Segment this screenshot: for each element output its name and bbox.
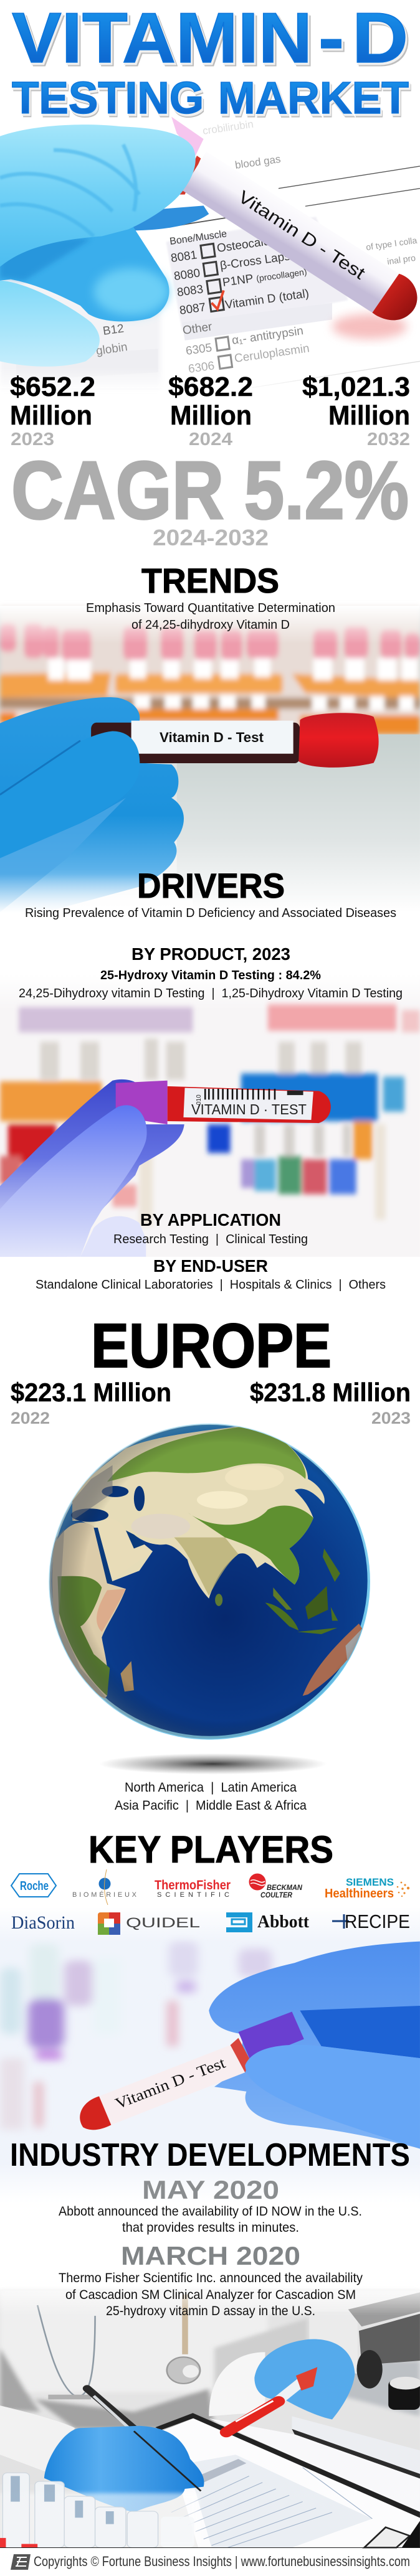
tube label text: VITAMIN D · TEST (191, 1101, 307, 1117)
title: D (353, 1, 409, 80)
market value 2023: 2023 (11, 430, 54, 449)
by product list: 24,25-Dihydroxy vitamin D Testing | 1,25-Dihydroxy Vitamin D Testing (19, 987, 403, 1000)
form text: 8087 (179, 301, 207, 317)
logo: Roche: Roche (20, 1879, 49, 1893)
icon: Fortune Business Insights logo (11, 2554, 31, 2570)
form text: 6306 (188, 359, 216, 376)
title: - (321, 2, 346, 81)
logo: DiaSorin: DiaSorin (11, 1912, 75, 1933)
title: TESTING (13, 75, 205, 125)
logo: Siemens Healthineers (325, 1876, 409, 1901)
title: TESTING (14, 77, 206, 126)
form text: 6305 (185, 341, 213, 358)
title: D (352, 0, 408, 78)
tube label text: Vitamin D - Test (160, 730, 264, 745)
logo: Beckman Coulter: COULTER (260, 1891, 292, 1899)
panel: hero (0, 0, 420, 449)
icon: gloved hand holding test tube (0, 116, 418, 367)
market value 2024: $682.2 (168, 372, 253, 402)
CAGR callout: 2024-2032 (153, 525, 269, 550)
heading: Europe: EUROPE (91, 1311, 332, 1381)
form text: 8080 (173, 266, 201, 283)
hero fade (0, 367, 420, 388)
form text: of type I colla (365, 235, 418, 252)
market value 2024 (168, 372, 253, 449)
by application heading: BY APPLICATION (140, 1210, 281, 1229)
heading: key players: KEY PLAYERS (88, 1828, 333, 1871)
form text: crobilirubin (202, 118, 254, 137)
title: MARKET (220, 77, 411, 126)
logo: Quidel (98, 1912, 200, 1935)
form text (95, 118, 418, 376)
Europe value 2023: 2023 (371, 1409, 411, 1427)
title (12, 0, 411, 126)
form text: Vitamin D (total) (224, 287, 310, 312)
Europe value 2023: $231.8 Million (250, 1378, 411, 1407)
Europe value 2022 (11, 1378, 171, 1427)
logo: Beckman Coulter (249, 1874, 302, 1899)
development: March 2020: MARCH 2020 (121, 2241, 300, 2270)
market value 2024: Million (170, 400, 252, 431)
development: March 2020: of Cascadion SM Clinical Analyzer for Cascadion SM (65, 2288, 356, 2302)
icon: globe (48, 1424, 375, 1774)
title: D (355, 2, 411, 81)
logo: Thermo Fisher Scientific: ThermoFisher (155, 1878, 231, 1892)
other regions list (115, 1780, 307, 1813)
by product lead value: 25-Hydroxy Vitamin D Testing : 84.2% (100, 969, 321, 982)
form text: inal pro (386, 253, 416, 266)
tube label text: Vitamin D - Test (235, 187, 369, 283)
form paper background (0, 111, 420, 388)
trends text: Emphasis Toward Quantitative Determination (86, 601, 335, 615)
market value 2032: 2032 (367, 430, 410, 449)
market value 2032: $1,021.3 (302, 372, 410, 402)
by end-user heading: BY END-USER (153, 1256, 268, 1276)
development: May 2020 (59, 2175, 362, 2235)
logo: Thermo Fisher Scientific (155, 1878, 231, 1899)
panel: segments (0, 944, 420, 1292)
by end-user list: Standalone Clinical Laboratories | Hospitals & Clinics | Others (36, 1278, 386, 1292)
other regions list: Asia Pacific | Middle East & Africa (115, 1798, 307, 1813)
title: VITAMIN (12, 0, 312, 78)
market value 2032 (302, 372, 410, 449)
title: - (320, 1, 345, 80)
photo: lab clinician writing and holding a tube (0, 2290, 420, 2547)
development: March 2020 (59, 2241, 363, 2318)
trends text (86, 601, 335, 632)
form text: Ceruloplasmin (234, 342, 310, 365)
panel: industry developments photo (0, 2137, 420, 2547)
photo: blood tube racks and gloved hand (0, 606, 420, 914)
market value 2032: Million (328, 400, 410, 431)
form text: β-Cross Laps (219, 250, 291, 273)
by application list: Research Testing | Clinical Testing (113, 1233, 308, 1246)
development: March 2020: Thermo Fisher Scientific Inc. announced the availability (59, 2271, 363, 2285)
form text: α₁- antitrypsin (231, 324, 304, 347)
form text: Other (182, 320, 213, 337)
logo: Beckman Coulter: BECKMAN (267, 1883, 302, 1892)
form text: blood gas (234, 153, 282, 171)
logo: bioMerieux (72, 1869, 137, 1905)
title: MARKET (218, 73, 409, 123)
logo: Recipe: RECIPE (345, 1911, 410, 1932)
photo: colored tube rack and gloved hand (0, 975, 420, 1257)
development: May 2020: Abbott announced the availability of ID NOW in the U.S. (59, 2204, 362, 2219)
title: MARKET (219, 75, 410, 125)
market value 2023 (10, 372, 95, 449)
development: May 2020: that provides results in minutes. (122, 2221, 299, 2235)
panel: trends photo (0, 606, 420, 914)
Europe value 2022: 2022 (11, 1409, 50, 1427)
heading: trends: TRENDS (141, 561, 279, 600)
logo: Quidel: QUIDEL (126, 1915, 200, 1930)
Europe value 2023 (250, 1378, 411, 1427)
title: - (318, 0, 344, 78)
logo: Siemens Healthineers: Healthineers (325, 1887, 394, 1901)
heading: drivers: DRIVERS (137, 866, 285, 905)
logo: Thermo Fisher Scientific: SCIENTIFIC (157, 1891, 229, 1899)
form text: Osteocalcin (216, 233, 279, 255)
development: May 2020: MAY 2020 (142, 2175, 279, 2204)
title: VITAMIN (13, 1, 313, 80)
market value 2023: Million (10, 400, 92, 431)
form text: P1NP (procollagen) (222, 265, 308, 289)
title: TESTING (12, 73, 204, 123)
form text: globin (95, 341, 128, 358)
logo: bioMerieux: BIOMÉRIEUX (72, 1891, 137, 1899)
market value 2023: $652.2 (10, 372, 95, 402)
drivers text: Rising Prevalence of Vitamin D Deficiency and Associated Diseases (25, 906, 396, 920)
globe shadow (99, 1753, 327, 1774)
market value 2024: 2024 (189, 430, 232, 449)
development: March 2020: 25-hydroxy vitamin D assay in the U.S. (106, 2304, 315, 2318)
logo: Roche (11, 1874, 56, 1897)
footer (0, 2547, 420, 2570)
tube serial: 010 (196, 1094, 203, 1105)
Europe value 2022: $223.1 Million (11, 1378, 171, 1407)
other regions list: North America | Latin America (125, 1780, 297, 1795)
form text: Bone/Muscle (169, 228, 227, 247)
tube label text: Vitamin D - Test (113, 2054, 227, 2113)
photo: purple vials and gloved hand (0, 1907, 420, 2201)
trends text: of 24,25-dihydroxy Vitamin D (131, 618, 290, 632)
title: VITAMIN (14, 2, 315, 81)
panel: key players (0, 1828, 420, 2201)
panel: Europe region (11, 1311, 411, 1813)
by product heading: BY PRODUCT, 2023 (131, 944, 290, 964)
form text: B12 (102, 322, 125, 338)
logo: Abbott (226, 1912, 310, 1932)
logo: Siemens Healthineers: SIEMENS (346, 1876, 394, 1888)
form text: 8081 (170, 248, 198, 265)
form text: 8083 (176, 283, 204, 299)
logo: Abbott: Abbott (257, 1912, 310, 1932)
